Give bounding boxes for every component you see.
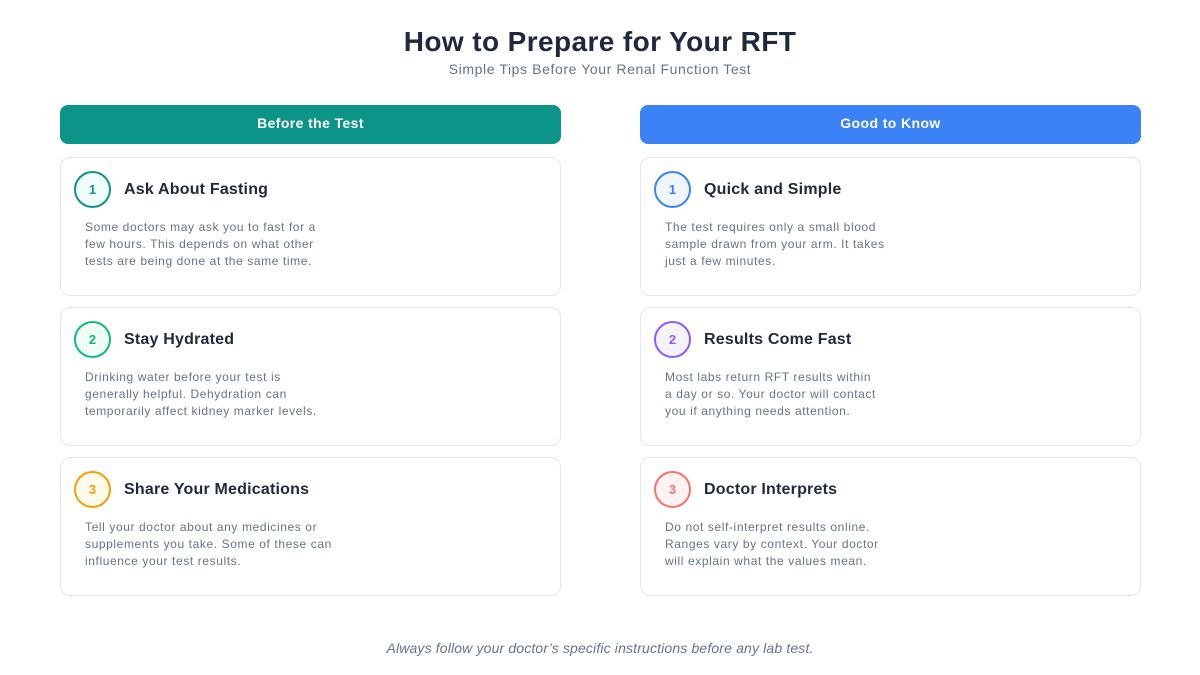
card: stay hydrated [60,307,561,446]
card text [665,520,879,568]
card title: Doctor Interprets [704,481,837,498]
card text: Some doctors may ask you to fast for a [85,220,316,234]
card title: Quick and Simple [704,181,841,198]
card text [85,520,332,568]
header: before the test [60,105,561,144]
icon: number 3: 3 [669,482,676,497]
icon: number 2: 2 [669,332,676,347]
card text [665,370,876,418]
subtitle: Simple Tips Before Your Renal Function Test [449,61,751,77]
icon: number 1 [654,171,691,208]
card text: The test requires only a small blood [665,220,876,234]
card title: Ask About Fasting [124,181,268,198]
card: share medications [60,457,561,596]
card text: Ranges vary by context. Your doctor [665,537,879,551]
card: quick and simple [640,157,1141,296]
card text: tests are being done at the same time. [85,254,312,268]
card text [85,220,316,268]
icon: number 1: 1 [89,182,96,197]
card text: Drinking water before your test is [85,370,281,384]
header: good to know: Good to Know [840,115,941,131]
header: good to know [640,105,1141,144]
card text [664,220,885,268]
card text: generally helpful. Dehydration can [85,387,287,401]
footer note: Always follow your doctor’s specific instructions before any lab test. [386,640,814,656]
card text: influence your test results. [85,554,241,568]
card text: Do not self-interpret results online. [665,520,870,534]
card text: you if anything needs attention. [665,404,850,418]
card title: Stay Hydrated [124,331,234,348]
card text: Most labs return RFT results within [665,370,871,384]
header: before the test: Before the Test [257,115,364,131]
card title: Share Your Medications [124,481,309,498]
card text: supplements you take. Some of these can [85,537,332,551]
icon: number 2: 2 [89,332,96,347]
card text: a day or so. Your doctor will contact [665,387,876,401]
card title: Results Come Fast [704,331,851,348]
card text: sample drawn from your arm. It takes [665,237,885,251]
card: results come fast [640,307,1141,446]
icon: number 3 [654,471,691,508]
title: How to Prepare for Your RFT [404,26,796,57]
card text: just a few minutes. [665,254,776,268]
icon: number 3: 3 [89,482,96,497]
icon: number 1: 1 [669,182,676,197]
card: ask about fasting [60,157,561,296]
icon: number 2 [74,321,111,358]
card: doctor interprets [640,457,1141,596]
card text: Tell your doctor about any medicines or [85,520,317,534]
icon: number 2 [654,321,691,358]
icon: number 3 [74,471,111,508]
icon: number 1 [74,171,111,208]
card text: few hours. This depends on what other [85,237,314,251]
card text [85,370,317,418]
card text: temporarily affect kidney marker levels. [85,404,317,418]
card text: will explain what the values mean. [665,554,867,568]
